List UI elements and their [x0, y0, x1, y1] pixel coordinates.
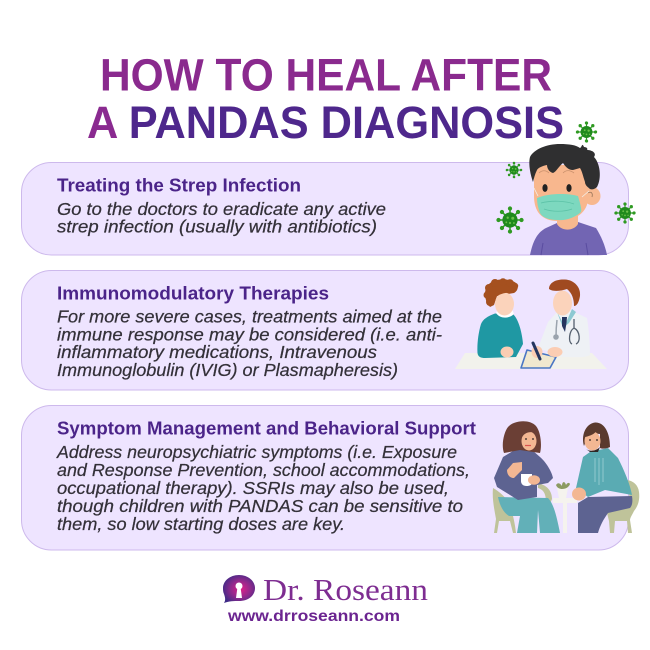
- body text: inflammatory medications, Intravenous: [57, 342, 377, 362]
- body text: Immunoglobulin (IVIG) or Plasmapheresis): [57, 360, 398, 380]
- website url: www.drroseann.com: [227, 608, 400, 625]
- title: [87, 50, 564, 148]
- body text: occupational therapy). SSRIs may also be used,: [57, 478, 449, 498]
- panel: treating the strep infection: [22, 122, 635, 255]
- icon: virus left upper: [506, 162, 522, 178]
- body text: [57, 306, 442, 380]
- body text: though children with PANDAS can be sensitive to: [57, 496, 463, 516]
- heading: Symptom Management and Behavioral Support: [57, 418, 476, 438]
- body text: For more severe cases, treatments aimed at the: [57, 306, 442, 326]
- body text: immune response may be considered (i.e. anti-: [57, 324, 442, 344]
- panel background: [22, 162, 628, 255]
- icon: virus top: [576, 122, 597, 142]
- body text: them, so low starting doses are key.: [57, 514, 345, 534]
- coffee table and plant: [553, 498, 577, 503]
- body text: [57, 199, 386, 236]
- panel: symptom management and behavioral support: [22, 406, 639, 550]
- body text: and Response Prevention, school accommodations,: [57, 460, 470, 480]
- icon: virus right: [615, 203, 635, 223]
- right woman's chair: [607, 480, 639, 533]
- panel background: [22, 270, 628, 390]
- heading: Immunomodulatory Therapies: [57, 284, 329, 304]
- illustration: doctor and patient at a table: [455, 278, 607, 369]
- title line 2: A PANDAS DIAGNOSIS: [87, 97, 564, 148]
- icon: boy wearing a mask: [529, 144, 607, 255]
- logo: [223, 572, 429, 625]
- body text: strep infection (usually with antibiotics): [57, 216, 377, 236]
- panel background: [22, 406, 628, 550]
- icon: virus left lower: [497, 207, 523, 233]
- panel: immunomodulatory therapies: [22, 270, 628, 390]
- body text: Address neuropsychiatric symptoms (i.e. Exposure: [56, 442, 457, 462]
- body text: [56, 442, 470, 534]
- heading: Treating the Strep Infection: [57, 176, 301, 196]
- title line 1: HOW TO HEAL AFTER: [100, 50, 552, 100]
- brand name: Dr. Roseann: [263, 572, 429, 607]
- left woman's chair: [493, 483, 552, 533]
- logo icon: speech bubble with keyhole: [223, 575, 255, 603]
- body text: Go to the doctors to eradicate any active: [57, 199, 386, 219]
- illustration: two women talking over coffee: [493, 421, 639, 533]
